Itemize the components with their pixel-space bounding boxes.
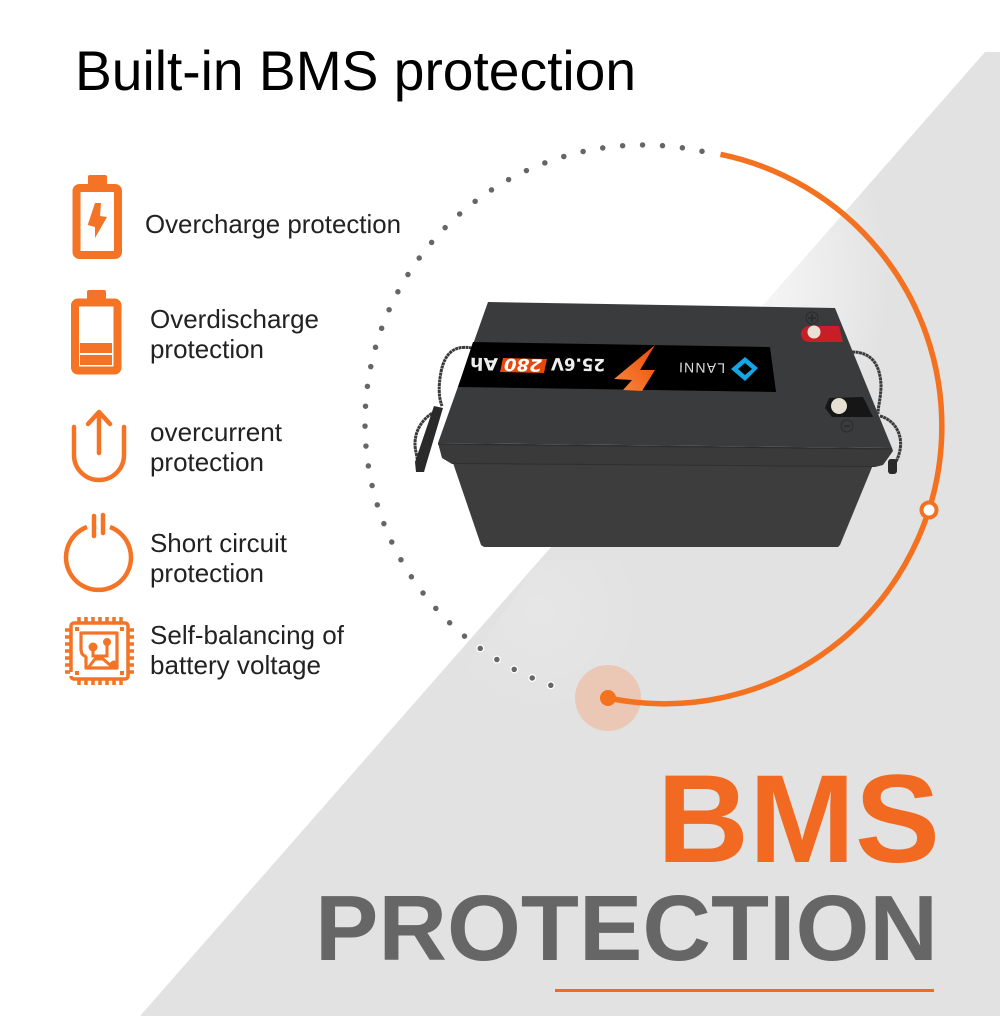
positive terminal bbox=[801, 312, 843, 342]
left handle grip bbox=[415, 406, 443, 472]
label: self balancing: battery voltage bbox=[150, 650, 321, 680]
lightning bolt bbox=[614, 345, 655, 391]
label: self balancing: Self-balancing of bbox=[150, 620, 345, 650]
capacity text: Ah bbox=[470, 353, 498, 373]
label: overcurrent: overcurrent bbox=[150, 417, 283, 447]
icon: battery charging bbox=[76, 175, 118, 255]
label: overdischarge: protection bbox=[150, 334, 264, 364]
voltage text: 25.6V bbox=[550, 353, 605, 374]
negative terminal bbox=[825, 397, 873, 432]
feature list bbox=[65, 175, 401, 685]
dotted ring bbox=[365, 145, 702, 686]
label: overdischarge: Overdischarge bbox=[150, 304, 319, 334]
capacity highlight box: 280 bbox=[504, 354, 542, 374]
right handle tip bbox=[888, 459, 897, 474]
icon: overcurrent arrow bbox=[74, 412, 124, 480]
brand LANNI: LANNI bbox=[679, 360, 725, 376]
lid seam shadow bbox=[452, 464, 875, 466]
endpoint dot bbox=[600, 690, 616, 706]
label: short circuit: Short circuit bbox=[150, 528, 288, 558]
battery lid edge bbox=[438, 443, 893, 467]
label: short circuit: protection bbox=[150, 558, 264, 588]
brand logo bbox=[731, 357, 758, 381]
icon: circuit chip bbox=[65, 617, 134, 685]
rope handles bbox=[415, 347, 901, 467]
label: overcurrent: protection bbox=[150, 447, 264, 477]
icon: battery low bbox=[75, 290, 118, 370]
orange ring arc bbox=[608, 154, 942, 704]
ring marker bbox=[922, 502, 936, 518]
heading PROTECTION: PROTECTION bbox=[315, 876, 938, 980]
icon: power short circuit bbox=[66, 515, 131, 590]
black label strip bbox=[458, 342, 776, 392]
battery top bbox=[438, 302, 892, 448]
endpoint halo bbox=[575, 665, 641, 731]
battery body bbox=[452, 460, 875, 547]
top edge seam bbox=[438, 444, 892, 449]
heading BMS: BMS bbox=[657, 750, 940, 889]
title: Built-in BMS protection bbox=[75, 39, 636, 102]
label: overcharge: Overcharge protection bbox=[145, 209, 401, 239]
battery illustration bbox=[415, 302, 901, 547]
underline bbox=[555, 989, 934, 992]
